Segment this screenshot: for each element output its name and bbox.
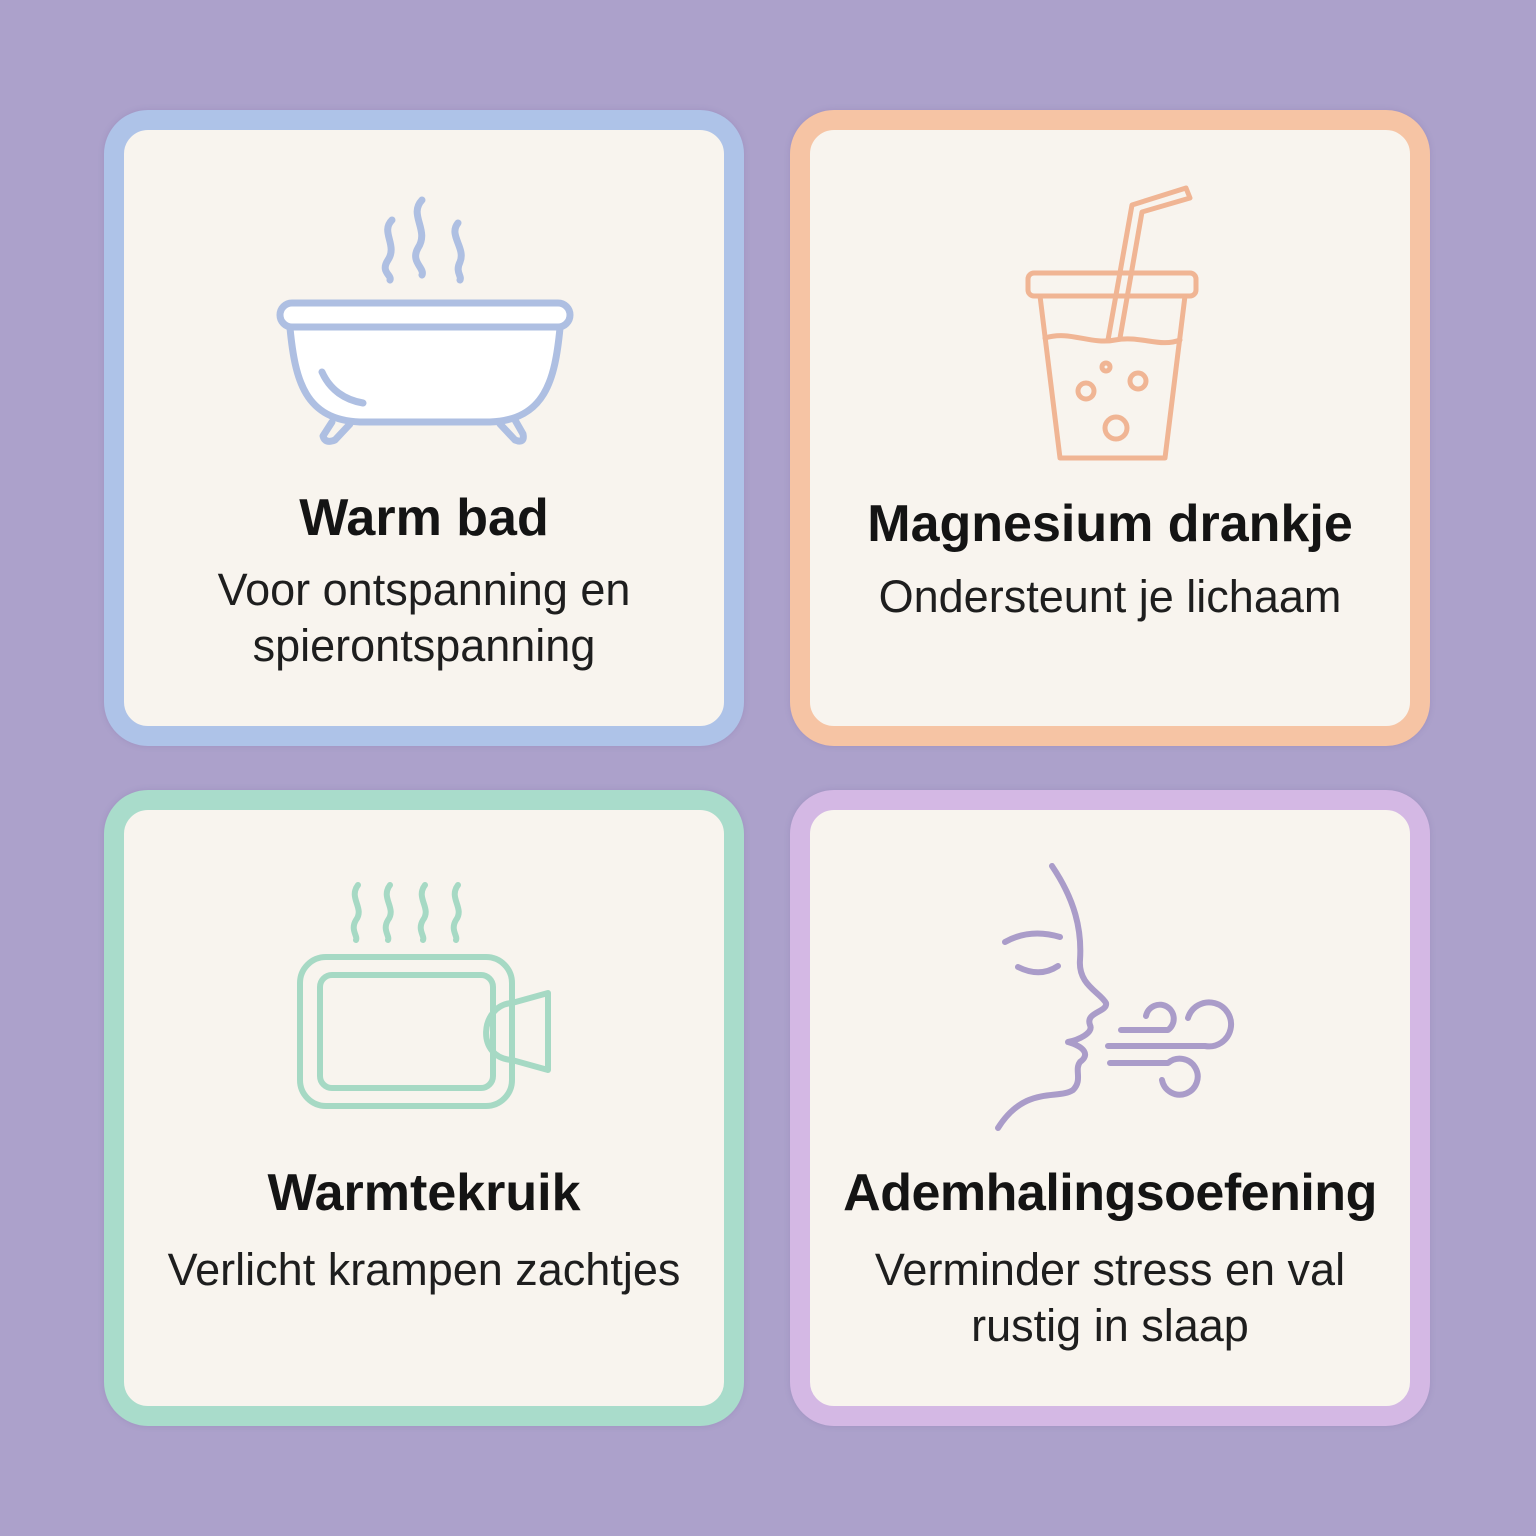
body text: Ondersteunt je lichaam <box>879 571 1341 622</box>
card: magnesium drankje <box>790 110 1430 746</box>
card: warmtekruik <box>104 790 744 1426</box>
body text: rustig in slaap <box>971 1300 1249 1351</box>
body text <box>218 564 630 671</box>
icon: drink cup <box>1026 186 1198 460</box>
body text: Verlicht krampen zachtjes <box>168 1244 680 1295</box>
title: Ademhalingsoefening <box>843 1164 1377 1222</box>
body text: Voor ontspanning en <box>218 564 630 615</box>
title: Magnesium drankje <box>867 495 1353 553</box>
icon: bathtub <box>276 196 574 445</box>
body text: Verminder stress en val <box>875 1244 1345 1295</box>
card: ademhalingsoefening <box>790 790 1430 1426</box>
icon: hot water bottle <box>297 882 551 1109</box>
body text: spierontspanning <box>253 620 595 671</box>
icon: breathing face <box>995 863 1234 1131</box>
title: Warm bad <box>299 489 549 547</box>
title: Warmtekruik <box>267 1164 581 1222</box>
card: warm bad <box>104 110 744 746</box>
body text <box>875 1244 1345 1351</box>
